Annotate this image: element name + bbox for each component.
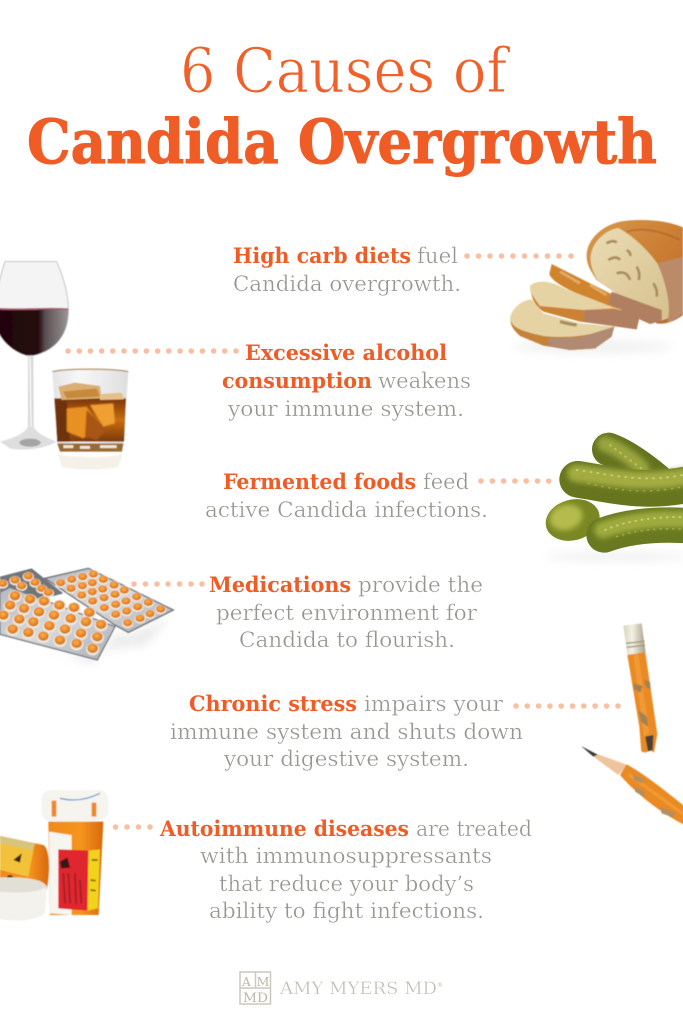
cause 5: chronic stress: impairs your <box>364 692 504 716</box>
cause 1: high carb diets: fuel <box>417 244 458 268</box>
cause 4: medications: provide the <box>358 573 483 597</box>
logo: Amy Myers MD: A <box>241 975 251 989</box>
cause 5: chronic stress: your digestive system. <box>223 747 469 771</box>
cause 1: high carb diets <box>233 243 461 296</box>
cause 2: excessive alcohol: your immune system. <box>227 397 464 421</box>
dotted connector: pills <box>131 581 205 587</box>
dotted connector: alcohol <box>65 348 239 354</box>
cause 4: medications: perfect environment for <box>216 601 478 625</box>
title <box>27 34 657 178</box>
cause 1: high carb diets: Candida overgrowth. <box>233 272 461 296</box>
dotted connector: bottle <box>113 824 153 830</box>
icon: prescription bottles <box>0 790 108 920</box>
logo: Amy Myers MD: M <box>256 975 270 989</box>
icon: wine glass and whisky tumbler <box>0 262 128 470</box>
logo: Amy Myers MD <box>240 972 443 1006</box>
logo: Amy Myers MD: ® <box>437 982 443 989</box>
cause 4: medications: Candida to flourish. <box>239 628 455 652</box>
cause 6: autoimmune diseases: with immunosuppressants <box>200 844 492 868</box>
cause 6: autoimmune diseases: ability to fight infections. <box>209 899 484 923</box>
cause 6: autoimmune diseases <box>159 816 532 923</box>
cause 3: fermented foods <box>205 469 488 522</box>
cause 1: high carb diets: High carb diets <box>233 243 411 268</box>
cause 3: fermented foods: active Candida infections. <box>205 498 488 522</box>
logo: Amy Myers MD: AMY MYERS MD <box>279 979 437 999</box>
icon: blister packs of pills <box>0 568 173 663</box>
cause 4: medications <box>209 572 483 652</box>
title: 6 Causes of <box>180 34 511 107</box>
cause 5: chronic stress <box>170 691 523 771</box>
dotted connector: bread <box>464 253 574 259</box>
cause 5: chronic stress: Chronic stress <box>189 691 357 716</box>
dotted connector: pickles <box>478 478 552 484</box>
cause 3: fermented foods: Fermented foods <box>223 469 416 494</box>
cause 4: medications: Medications <box>209 572 351 597</box>
cause 6: autoimmune diseases: are treated <box>416 817 532 841</box>
cause 2: excessive alcohol <box>222 340 471 421</box>
icon: broken pencil <box>581 623 683 825</box>
icon: pickles <box>541 444 683 561</box>
cause 3: fermented foods: feed <box>423 470 469 494</box>
dotted connector: pencil <box>513 703 621 709</box>
cause 6: autoimmune diseases: Autoimmune diseases <box>159 816 409 841</box>
cause 6: autoimmune diseases: that reduce your body’s <box>219 872 474 896</box>
cause 2: excessive alcohol: weakens <box>378 369 471 393</box>
cause 2: excessive alcohol: consumption <box>222 368 372 393</box>
icon: sliced bread <box>510 220 683 353</box>
cause 2: excessive alcohol: Excessive alcohol <box>245 340 447 365</box>
cause 5: chronic stress: immune system and shuts down <box>170 720 523 744</box>
logo: Amy Myers MD: MD <box>243 991 268 1006</box>
